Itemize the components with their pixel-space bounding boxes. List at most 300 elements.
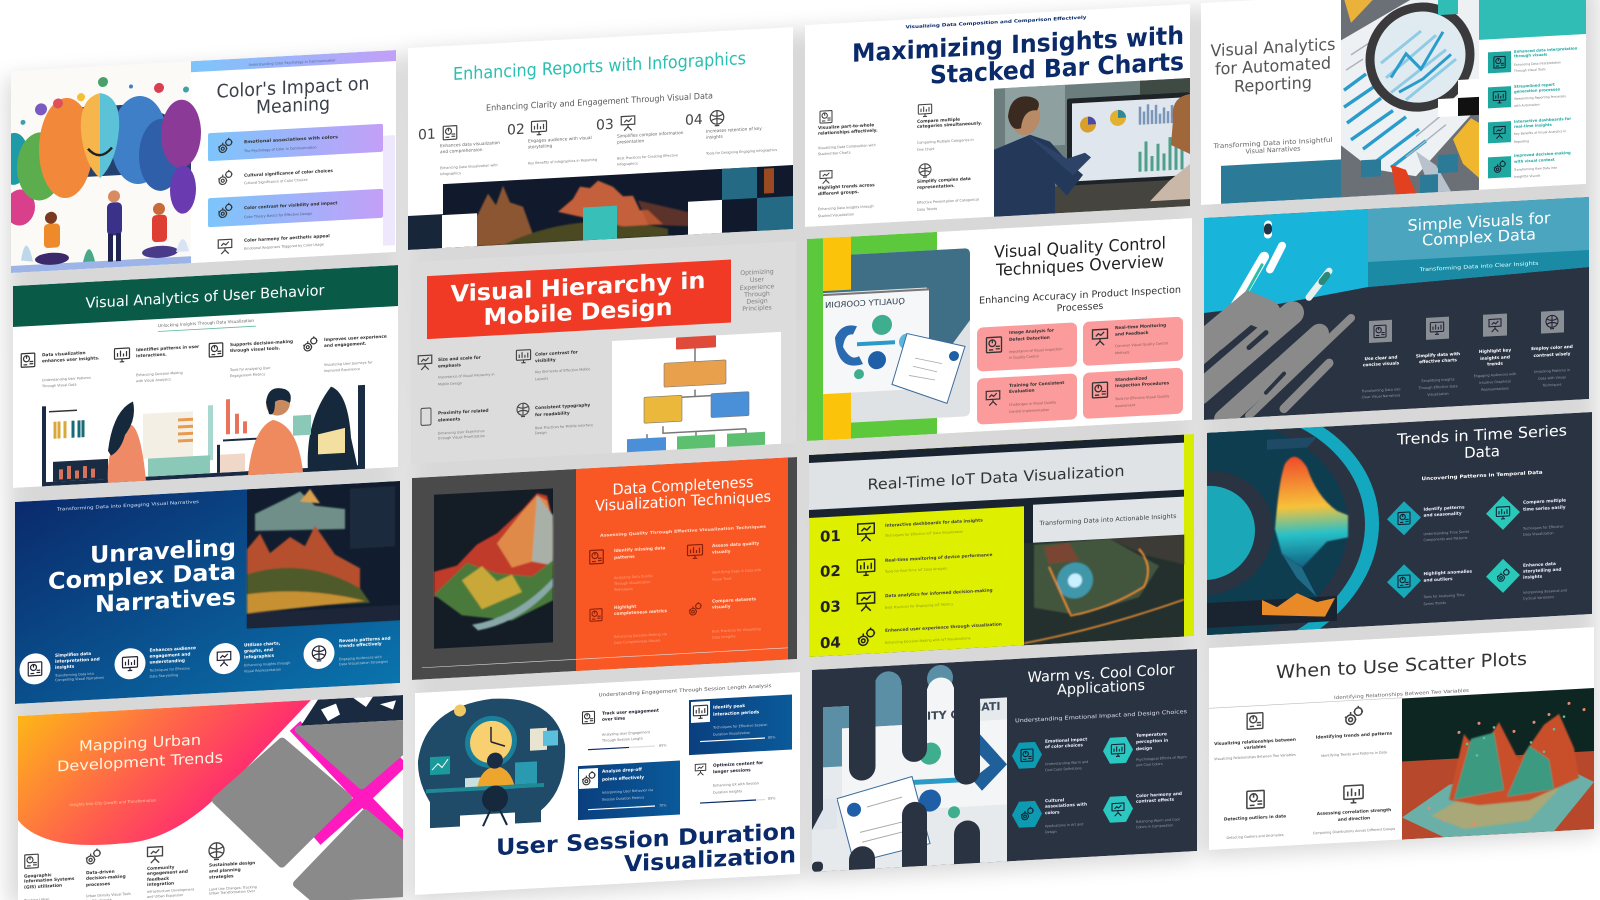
item 4: Visualizing User Journeys for: [324, 360, 373, 367]
item: harmony: contrast effects: [1136, 797, 1175, 805]
decoration: diagonal pills: [1194, 220, 1351, 421]
box: analyze drop-off: [578, 761, 680, 820]
item: missing patterns: [590, 545, 666, 593]
item: data-driven: [86, 847, 131, 900]
item: quality assess: Identifying Gaps in Data with: [712, 568, 761, 575]
item: improved decisions: with visual context: [1514, 157, 1555, 164]
item: emotional impact: [1012, 736, 1088, 774]
step 02: Key Benefits of Infographics in Reporting: [528, 158, 597, 165]
column 3: Representations: [1481, 386, 1509, 392]
item: outliers: Detecting Outliers and Anomalies: [1226, 833, 1284, 840]
column 2: Simplify data with: [1416, 351, 1460, 359]
title: Complex Data: [48, 559, 236, 595]
card: standardized: [1083, 368, 1183, 419]
item 2: understanding: [150, 658, 185, 666]
item: missing patterns: Identify missing data: [614, 545, 666, 554]
item: patterns: Identify patterns: [1423, 504, 1465, 513]
item 4: [303, 332, 387, 374]
card: cultural significance: Cultural significance of color choices: [244, 168, 333, 179]
side subtitle: Optimizing: [740, 268, 774, 277]
item: interactive dashboards: Reporting: [1514, 139, 1529, 144]
item 2: interactions.: [136, 352, 167, 359]
item 3: infographics: [244, 653, 275, 661]
item: compare series: Techniques for Effective: [1522, 525, 1563, 531]
column 2: Simplifying Insights: [1421, 377, 1455, 383]
item: part-to-whole: Visualizing Data Composition with: [818, 143, 876, 150]
photo: quality certificates: [823, 248, 970, 424]
item 1: Understanding User Patterns: [42, 376, 91, 382]
column 3: [1474, 313, 1516, 392]
item: harmony: Colors in Composition: [1136, 823, 1173, 829]
item 4: Improves user experience: [324, 334, 387, 343]
row 01: Interactive dashboards for data insights: [885, 518, 983, 529]
card: cultural significance: Cultural Significance of Color Choices: [244, 178, 308, 185]
item: harmony: Color harmony and: [1136, 791, 1182, 799]
title: Stacked Bar Charts: [930, 47, 1184, 90]
subtitle: Enhancing Accuracy in Product Inspection: [979, 285, 1181, 307]
item: highlight trends: Stacked Visualization: [818, 212, 854, 218]
item 2: engagement and: [150, 651, 190, 660]
title: Visualization Techniques: [595, 487, 771, 515]
item: compare datasets: Best Practices for Visualizing: [712, 627, 761, 634]
item: optimize content: 85%: [768, 796, 776, 801]
card: image analysis: Image Analysis for: [1009, 327, 1055, 336]
item 4: Improved Experience: [324, 367, 360, 373]
item: sustainable: Urban Transformation Over: [209, 889, 256, 896]
item: harmony: Balancing Warm and Cool: [1136, 817, 1180, 824]
card: training: Challenges in Visual Quality: [1009, 400, 1056, 407]
item: sustainable: Land Use Changes: Tracking: [209, 885, 257, 892]
step 01: Enhancing Data Visualization with: [440, 163, 498, 170]
box: identify peak: Identify peak: [713, 703, 745, 711]
title: Reporting: [1234, 73, 1312, 96]
card: color harmony: Color harmony for aesthetic appeal: [244, 233, 330, 244]
slide: Unraveling Complex Data Narratives: [15, 481, 400, 704]
subtitle: Transforming Data into Insightful: [1212, 136, 1333, 150]
item: harmony: [1103, 791, 1182, 831]
card: real-time monitoring: Real-time Monitoring: [1115, 322, 1166, 331]
item 1: [21, 349, 100, 390]
image: 3D scatter plot: [1402, 688, 1594, 839]
title: Development Trends: [57, 750, 223, 775]
item 4: Reveals patterns and: [339, 636, 391, 644]
card: training: Control Implementation: [1009, 408, 1049, 414]
column 4: contrast wisely: [1534, 351, 1571, 359]
card: standardized: Assessment: [1115, 403, 1136, 408]
item 3: [209, 339, 293, 379]
illustration: two-faced mask and people: [11, 77, 201, 273]
grey diamonds: [216, 724, 403, 900]
item: anomalies: Tools for Analyzing Time: [1423, 593, 1465, 599]
step 02: 02: [507, 122, 525, 139]
title: Visualization: [624, 842, 796, 878]
slide: Real-Time IoT Data Visualization: [809, 434, 1194, 657]
cyan top with slanted edge: [1204, 197, 1589, 313]
item: temperature: Psychological Effects of Warm: [1136, 755, 1187, 762]
column 1: Clear Visual Narratives: [1362, 393, 1401, 399]
item: completeness metrics: completeness metrics: [614, 608, 668, 617]
item: streamlined generation: Streamlining Reporting Processes: [1514, 94, 1566, 101]
item: community: [147, 845, 195, 899]
item: community: Community: [147, 864, 175, 872]
item 3: graphs, and: [244, 647, 273, 655]
title panel: Simple Visuals for: [1408, 209, 1551, 235]
item: color contrast: visibility: [535, 357, 556, 364]
item: completeness metrics: [590, 602, 668, 646]
step 01: 01: [418, 126, 436, 143]
item: compare datasets: Compare datasets: [712, 596, 757, 605]
title: Data Completeness: [612, 473, 754, 499]
item 2: [114, 645, 196, 681]
title: Color's Impact on: [216, 73, 370, 103]
item 3: Supports decision-making: [230, 339, 293, 348]
title: Maximizing Insights with: [852, 21, 1184, 68]
item: sustainable: Sustainable design: [209, 860, 255, 869]
item: GIS: Geographic: [24, 872, 52, 880]
item 2: with Visual Analytics: [136, 377, 171, 383]
step 03: Best Practices for Creating Effective: [617, 153, 678, 161]
item: enhanced interpretation: Through Visual Tools: [1513, 67, 1546, 73]
column 3: Highlight key: [1479, 347, 1511, 355]
item 3: Tools for Analyzing User: [229, 366, 271, 372]
item 2: [114, 344, 200, 384]
item: simplify: Data Trends: [917, 207, 937, 212]
item: anomalies: Series Trends: [1423, 601, 1446, 606]
card: cultural significance: [218, 169, 333, 186]
item: streamlined generation: [1488, 83, 1566, 108]
slide: Mapping Urban Development Trends: [18, 695, 403, 900]
column 3: Engaging Audiences with: [1474, 372, 1516, 378]
title: Applications: [1057, 678, 1145, 699]
box: analyze drop-off: Interpreting User Behavior via: [602, 788, 653, 795]
subtitle: Uncovering Patterns in Temporal Data: [1422, 470, 1543, 482]
photo: analysts at monitor: [994, 78, 1190, 217]
item: compare categories: One Chart: [917, 147, 935, 152]
item: size and scale: Importance of Visual Hierarchy in: [438, 372, 495, 380]
item: sustainable: strategies: [209, 873, 234, 881]
row 04: Enhancing Decision-Making with IoT Visualizations: [885, 636, 971, 645]
column 4: [1531, 310, 1573, 388]
row 01: Techniques for Effective IoT Data Visualization: [884, 530, 963, 538]
item: temperature: [1103, 730, 1187, 769]
item: enhanced interpretation: through visuals: [1514, 52, 1548, 58]
item: anomalies: Highlight anomalies: [1423, 569, 1472, 577]
column 4: Employ color and: [1531, 344, 1573, 352]
card: training: Evaluation: [1009, 388, 1035, 395]
item: proximity: [421, 405, 489, 441]
item: cultural: Cultural: [1045, 797, 1065, 804]
card: real-time monitoring: and Feedback: [1115, 330, 1149, 338]
step 03: Simplifies complex information: [617, 130, 684, 140]
row 04: 04: [820, 633, 841, 652]
row 03: Best Practices for Displaying IoT Metrics: [885, 602, 953, 610]
column 1: concise visuals: [1363, 360, 1400, 368]
illustration: team with dashboards: [42, 383, 365, 486]
title band: [809, 443, 1184, 510]
step 02: Engages audience with visual: [528, 135, 592, 144]
item: track engagement: Through Session Length: [601, 737, 643, 743]
row 01: 01: [820, 527, 841, 546]
item 4: trends effectively: [339, 641, 382, 649]
card: image analysis: Importance of Visual Inspection: [1009, 347, 1063, 354]
side subtitle: User: [750, 276, 764, 284]
map fragment: [301, 695, 403, 726]
item 2: Enhancing Decision-Making: [136, 371, 183, 377]
item: proximity: Enhancing User Experience: [438, 429, 485, 436]
card: emotional associations: The Psychology of Color in Communication: [243, 145, 317, 153]
row 01: [820, 517, 983, 546]
item: part-to-whole: relationships effectively.: [818, 128, 878, 137]
title box: [427, 260, 731, 339]
card: real-time monitoring: Methods: [1115, 350, 1130, 355]
card: color contrast: Color Theory Basics for Effective Design: [244, 212, 312, 219]
card: image analysis: [977, 322, 1077, 372]
title: Warm vs. Cool Color: [1028, 662, 1175, 686]
image: mountain data chart: [434, 488, 553, 649]
column 2: Visualization: [1427, 392, 1449, 397]
box: identify peak: [689, 694, 792, 755]
photo: quality certificates: QUALITY COORDIN: [825, 297, 905, 310]
item: optimize content: Duration Insights: [713, 789, 742, 795]
item: simplify: Effective Presentation of Categorical: [917, 198, 979, 205]
item: typography: [517, 399, 593, 436]
item 1: Compelling Visual Narratives: [55, 676, 104, 682]
item 1: interpretation and: [55, 656, 100, 665]
item: quality assess: [688, 540, 761, 583]
column 3: insights and: [1480, 354, 1510, 362]
item: community: feedback: [147, 876, 169, 883]
item: trends: Identifying trends and patterns: [1316, 730, 1393, 741]
item: patterns: Components and Patterns: [1423, 536, 1468, 542]
item: storytelling: Interpreting Seasonal and: [1523, 588, 1567, 595]
item 1: Simplifies data: [55, 651, 91, 659]
item: outliers: Detecting outliers in data: [1224, 813, 1286, 823]
step 02: storytelling: [528, 143, 552, 150]
item: improved decisions: [1488, 151, 1570, 178]
title: User Session Duration: [496, 819, 796, 861]
item 2: Enhances audience: [150, 645, 196, 654]
item: patterns: and seasonality: [1423, 511, 1462, 519]
item: temperature: perception in: [1136, 738, 1168, 745]
row 02: Tools for Real-Time IoT Data Analysis: [884, 566, 947, 574]
image with pill mask: ITY CO: [927, 708, 968, 723]
item: missing patterns: patterns: [614, 554, 635, 561]
title: Unraveling: [90, 535, 236, 569]
item: GIS: Information Systems: [24, 876, 75, 885]
item 4: Engaging Audiences with: [339, 655, 382, 661]
item 3: [209, 639, 290, 675]
item: temperature: Temperature: [1136, 731, 1167, 739]
item: interactive dashboards: Interactive dashboards for: [1514, 116, 1571, 124]
title: Techniques Overview: [995, 252, 1164, 280]
image: smart city night: [809, 435, 1184, 657]
item: completeness metrics: Data Completeness Visuals: [614, 638, 660, 645]
card: color contrast: [208, 189, 383, 227]
item: anomalies: and outliers: [1423, 576, 1453, 584]
row 03: Data analytics for informed decision-making: [885, 587, 993, 599]
item: highlight trends: [818, 168, 875, 218]
item: typography: for readability: [535, 410, 570, 418]
title: Visual Quality Control: [994, 233, 1166, 262]
item: community: and Urban Expansion: [147, 893, 183, 899]
item: compare datasets: Data Integrity: [712, 634, 736, 640]
slide: Visual Analytics of User Behavior: [13, 265, 398, 488]
subtitle: Visual Narratives: [1245, 145, 1301, 156]
box: identify peak: Techniques for Effective Session: [712, 723, 767, 730]
slide: Warm vs. Cool Color Applications: [812, 649, 1197, 872]
item: compare series: Data Visualization: [1523, 531, 1554, 537]
header band with title: [13, 265, 398, 327]
card: standardized: Standardized: [1115, 375, 1147, 383]
kicker: Visualizing Data Composition and Comparison Effectively: [906, 15, 1087, 31]
side subtitle: Experience: [740, 283, 774, 292]
item 3: Utilizes charts,: [244, 641, 281, 649]
header band with title: Visual Analytics of User Behavior: [85, 283, 325, 312]
row 04: [820, 620, 1002, 652]
title: Trends in Time Series: [1396, 421, 1567, 449]
circular image with heat chart: [1035, 389, 1379, 677]
orange panel: [576, 458, 788, 671]
item: optimize content: [695, 759, 776, 805]
title: Visual Analytics: [1210, 35, 1335, 60]
row 03: [820, 586, 993, 616]
item 1: Through Visual Data: [41, 383, 76, 388]
column 3: trends: [1487, 361, 1503, 368]
magenta cross bands: [295, 720, 403, 846]
item: storytelling: storytelling and: [1523, 567, 1562, 575]
box: analyze drop-off: Analyze drop-off: [602, 767, 642, 775]
title panel: [1368, 197, 1589, 262]
item: enhanced interpretation: Enhancing Data Interpretation: [1514, 60, 1561, 67]
step 03: Infographics: [617, 161, 638, 167]
slide: Trends in Time Series Data: [1035, 377, 1592, 677]
step 02: [507, 118, 597, 167]
item: proximity: through Visual Prioritization: [438, 434, 485, 441]
item: outliers: [1224, 789, 1286, 840]
item: typography: Best Practices for Mobile Interface: [535, 423, 593, 430]
item: data-driven: Urban Density Visual Tools: [86, 892, 131, 898]
card: training: Training for Consistent: [1009, 380, 1064, 389]
item: relationships: Visualizing relationships between: [1214, 737, 1296, 747]
step 04: 04: [685, 112, 703, 129]
slide: Maximizing Insights with Stacked Bar Charts: [805, 4, 1190, 227]
slide: Data Completeness Visualization Techniques: [412, 457, 797, 680]
card: color contrast: Color contrast for visibility and impact: [244, 200, 337, 211]
item: simplify: Simplify complex data: [917, 176, 971, 185]
step 01: and comprehension: [440, 147, 483, 155]
card: emotional associations: [208, 124, 383, 161]
slide: When to Use Scatter Plots: [1209, 627, 1594, 850]
item: size and scale: Size and scale for: [438, 355, 482, 363]
box: analyze drop-off: Session Duration Metrics: [602, 796, 644, 802]
title: Meaning: [256, 94, 330, 119]
item: community: integration: [147, 880, 174, 888]
item 3: Enhancing Insights through: [244, 661, 290, 668]
item: interactive dashboards: real-time insights: [1514, 122, 1553, 129]
item: GIS: (GIS) utilization: [24, 883, 62, 891]
item: patterns: [1387, 498, 1470, 544]
item: missing patterns: Analyzing Data Quality: [614, 574, 653, 580]
item: completeness metrics: Highlight: [614, 604, 636, 611]
item: enhanced interpretation: Enhanced data interpretation: [1514, 45, 1578, 54]
item: relationships: variables: [1244, 744, 1267, 751]
step 03: 03: [596, 117, 614, 134]
box: identify peak: 80%: [768, 735, 776, 740]
box: identify peak: interaction periods: [713, 709, 760, 718]
slide: Visual Quality Control Techniques Overview: [807, 218, 1192, 441]
title: Narratives: [95, 584, 236, 618]
item: part-to-whole: Stacked Bar Charts: [818, 151, 851, 156]
item 2: Identifies patterns in user: [136, 344, 200, 353]
item: temperature: design: [1136, 745, 1152, 752]
image with pill mask: NATI: [972, 700, 1000, 714]
kicker: Understanding Engagement Through Session Length Analysis: [599, 683, 772, 698]
item: enhanced interpretation: [1488, 45, 1578, 74]
subtitle: Understanding Emotional Impact and Design Choices: [1015, 709, 1187, 724]
item: compare series: [1486, 492, 1566, 539]
item: community: engagement and: [147, 869, 188, 877]
item 2: Techniques for Effective: [149, 666, 190, 673]
item: data-driven: processes: [86, 881, 111, 888]
item: cultural: Design: [1045, 830, 1057, 834]
item: quality assess: Assess data quality: [712, 541, 759, 549]
item: compare categories: Comparing Multiple Categories in: [917, 138, 974, 145]
item: compare categories: categories simultaneously.: [917, 120, 982, 130]
item: storytelling: [1486, 555, 1567, 603]
step 01: Enhances data visualization: [440, 140, 500, 149]
box: identify peak: Duration Visualization: [713, 731, 750, 737]
item: compare categories: Compare multiple: [917, 117, 960, 125]
item: size and scale: Mobile Design: [438, 381, 462, 387]
kicker: Transforming Data into Engaging Visual Narratives: [56, 499, 200, 513]
item: optimize content: longer sessions: [713, 767, 751, 775]
item: simplify: representation.: [917, 183, 955, 191]
item: compare categories: [917, 101, 982, 152]
column 4: Data with Visual: [1538, 375, 1566, 381]
item: color contrast: Key Elements of Effective Mobile: [535, 367, 590, 374]
item: patterns: Understanding Time Series: [1423, 530, 1470, 536]
column 4: Techniques: [1542, 383, 1562, 388]
item: anomalies: [1387, 561, 1472, 608]
row 02: [820, 552, 992, 581]
card: color harmony: Emotional Responses Triggered by Color Usage: [244, 242, 324, 251]
card: image analysis: Defect Detection: [1009, 335, 1050, 343]
card: standardized: Tools for Effective Visual Quality: [1114, 394, 1169, 401]
subtitle: Unlocking Insights Through Data Visualization: [158, 318, 254, 328]
row 02: 02: [820, 562, 841, 581]
box: analyze drop-off: points effectively: [602, 775, 644, 783]
item: size and scale: [418, 352, 495, 388]
title: Enhancing Reports with Infographics: [453, 49, 746, 85]
item: correlation: Assessing correlation strength: [1317, 807, 1391, 817]
colour frame: [807, 232, 937, 441]
item: data-driven: decision-making: [86, 874, 126, 882]
image with pill mask: [812, 659, 1007, 872]
item: improved decisions: Insightful Visuals: [1514, 173, 1541, 179]
item: track engagement: Track user engagement: [602, 708, 659, 717]
title panel: Complex Data: [1422, 225, 1536, 250]
item 4: [304, 634, 391, 670]
item: missing patterns: Through Visualization: [613, 580, 651, 586]
slide: Visual Analytics for Automated Reporting: [1201, 0, 1586, 205]
step 03: [596, 113, 684, 168]
item 4: and engagement.: [324, 341, 367, 349]
slide: Simple Visuals for Complex Data: [1194, 197, 1589, 421]
step 04: [685, 107, 777, 157]
item 1: enhances user insights.: [42, 355, 100, 364]
item: trends: [1316, 704, 1393, 758]
item: optimize content: Enhancing UX with Session: [713, 781, 759, 788]
